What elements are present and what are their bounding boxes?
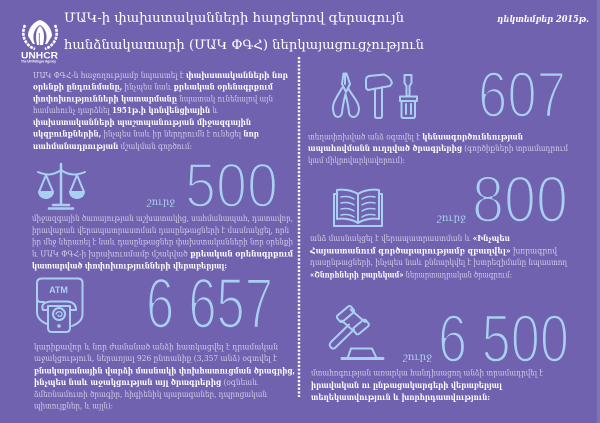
text block: introduction	[33, 71, 288, 152]
text block: 800 description: «Շնորհների բարեկամ» ներարտադրական ծրագրում:	[310, 270, 512, 280]
title	[64, 11, 424, 53]
icon: UNHCR logo: UNHCR	[21, 50, 58, 62]
text block: 500 description: իր մեջ ներառել է նաև դասընթացներ փախստականների նոր օրենքի	[32, 238, 294, 248]
text block: 6 657 description: բնակարանային վարձի մասնակի փոխհատուցման ծրագրից,	[34, 366, 295, 376]
text block: 6 657 description: պիտույքներ, և այլն):	[34, 400, 113, 412]
stat: about 6 500: շուրջ	[402, 352, 432, 363]
stat: about 500: շուրջ	[146, 197, 175, 208]
text block: 607 description: կամ միկրովարկավորում):	[308, 155, 405, 166]
stat: about 800: շուրջ	[436, 213, 466, 224]
title: ՄԱԿ-ի փախստականների հարցերով գերագույն	[64, 11, 404, 26]
text block: 500 description	[32, 213, 294, 272]
stat: about 800	[436, 162, 568, 236]
icon: ATM	[37, 278, 82, 332]
title: հանձնակատարի (ՄԱԿ ՓԳՀ) ներկայացուցչություն	[64, 38, 424, 53]
text block: 6 500 description: տեղեկատվություն և խորհրդատվություն:	[311, 393, 490, 403]
text block: 6 657 description: ինչպես նաև աջակցության այլ ծրագրերից (օգնեաև	[34, 377, 258, 388]
text block: 6 657 description: ձմեռնամուտի ծրագիր, հիգիենիկ պարագաներ, դպրոցական	[34, 389, 267, 400]
icon: tools	[333, 74, 417, 118]
text block: introduction: սկզբունքներին, ինչպես նաև իր ներդրումն է ունեցել նոր	[33, 130, 259, 140]
stat: about 500: 500	[185, 151, 278, 221]
text block: introduction: փոփոխությունների կատարմանը նպատակ ունենալով այն	[33, 94, 273, 104]
stat: 607: 607	[478, 58, 566, 131]
text block: introduction: օրենքի ընդունմանը, ինչպես նաև քրեական օրենսգրքում	[33, 82, 274, 92]
stat: about 800: 800	[472, 162, 568, 236]
text block: 6 657 description: աջակցություն, ներառյալ 926 ընտանիք (3,357 անձ) օգտվել է	[34, 353, 278, 364]
icon: ATM: ATM	[49, 285, 68, 295]
text block: 607 description: ապահովմանն ուղղված ծրագրերից (գործիքների տրամադրում	[308, 143, 568, 154]
text block: 500 description: իրավաբան վերապատրաստման դասընթացների է մասնակցել, որն	[32, 226, 289, 236]
text block: 800 description: Հայաստանում գործարարությամբ զբաղվել» խորագրով	[309, 246, 558, 256]
text block: 500 description: միջազգային ծառայության աշխատակից, սահմանապահ, դատավոր,	[32, 213, 293, 224]
text block: introduction: սահմանադրության մշակման գործում:	[33, 141, 192, 152]
stat: about 500	[146, 151, 278, 221]
text block: introduction: ՄԱԿ ՓԳՀ-ն հաջողությամբ նպաստել է փախստականների նոր	[33, 71, 288, 81]
icon: UNHCR logo: The UN Refugee Agency	[21, 60, 56, 64]
text block: introduction: համահունչ դարձնել 1951թ.ի կոնվենցիային և	[33, 106, 218, 116]
text block: 800 description	[309, 234, 567, 280]
stat: about 6 500	[402, 301, 569, 377]
text block: 607 description: տեղափոխված անձ օգտվել է կենսագործունեության	[308, 132, 523, 142]
icon: UNHCR logo	[21, 20, 58, 64]
text block: 6 500 description	[311, 368, 544, 403]
icon: open book	[334, 190, 382, 226]
text block: 6 500 description: իրավական ու ընթացակարգերի վերաբերյալ	[311, 381, 503, 391]
stat: 6 657: 6 657	[146, 265, 273, 344]
text block: 6 657 description: կարիքավոր և նոր ժամանած անձի հատկացվել է դրամական	[34, 342, 279, 352]
text block: 800 description: անձ մասնակցել է վերապատրաստման և «Ինչպես	[310, 234, 510, 244]
text block: introduction: փախստականների պաշտպանության միջազգային	[33, 118, 251, 128]
icon: scales	[38, 164, 85, 208]
icon: gavel	[330, 305, 383, 358]
text block: 500 description: կատարված փոփոխությունների վերաբերյալ:	[32, 260, 227, 272]
text block: 500 description: և ՄԱԿ ՓԳՀ-ի խրախուսմամբ մշակված քրեական օրենսգրքում	[32, 248, 294, 260]
text block: 6 657 description	[34, 342, 295, 412]
text block: 6 500 description: մտահոգության առարկա հանդիսացող անձի տրամադրվել է	[311, 368, 544, 378]
text block: 607 description	[308, 132, 568, 166]
